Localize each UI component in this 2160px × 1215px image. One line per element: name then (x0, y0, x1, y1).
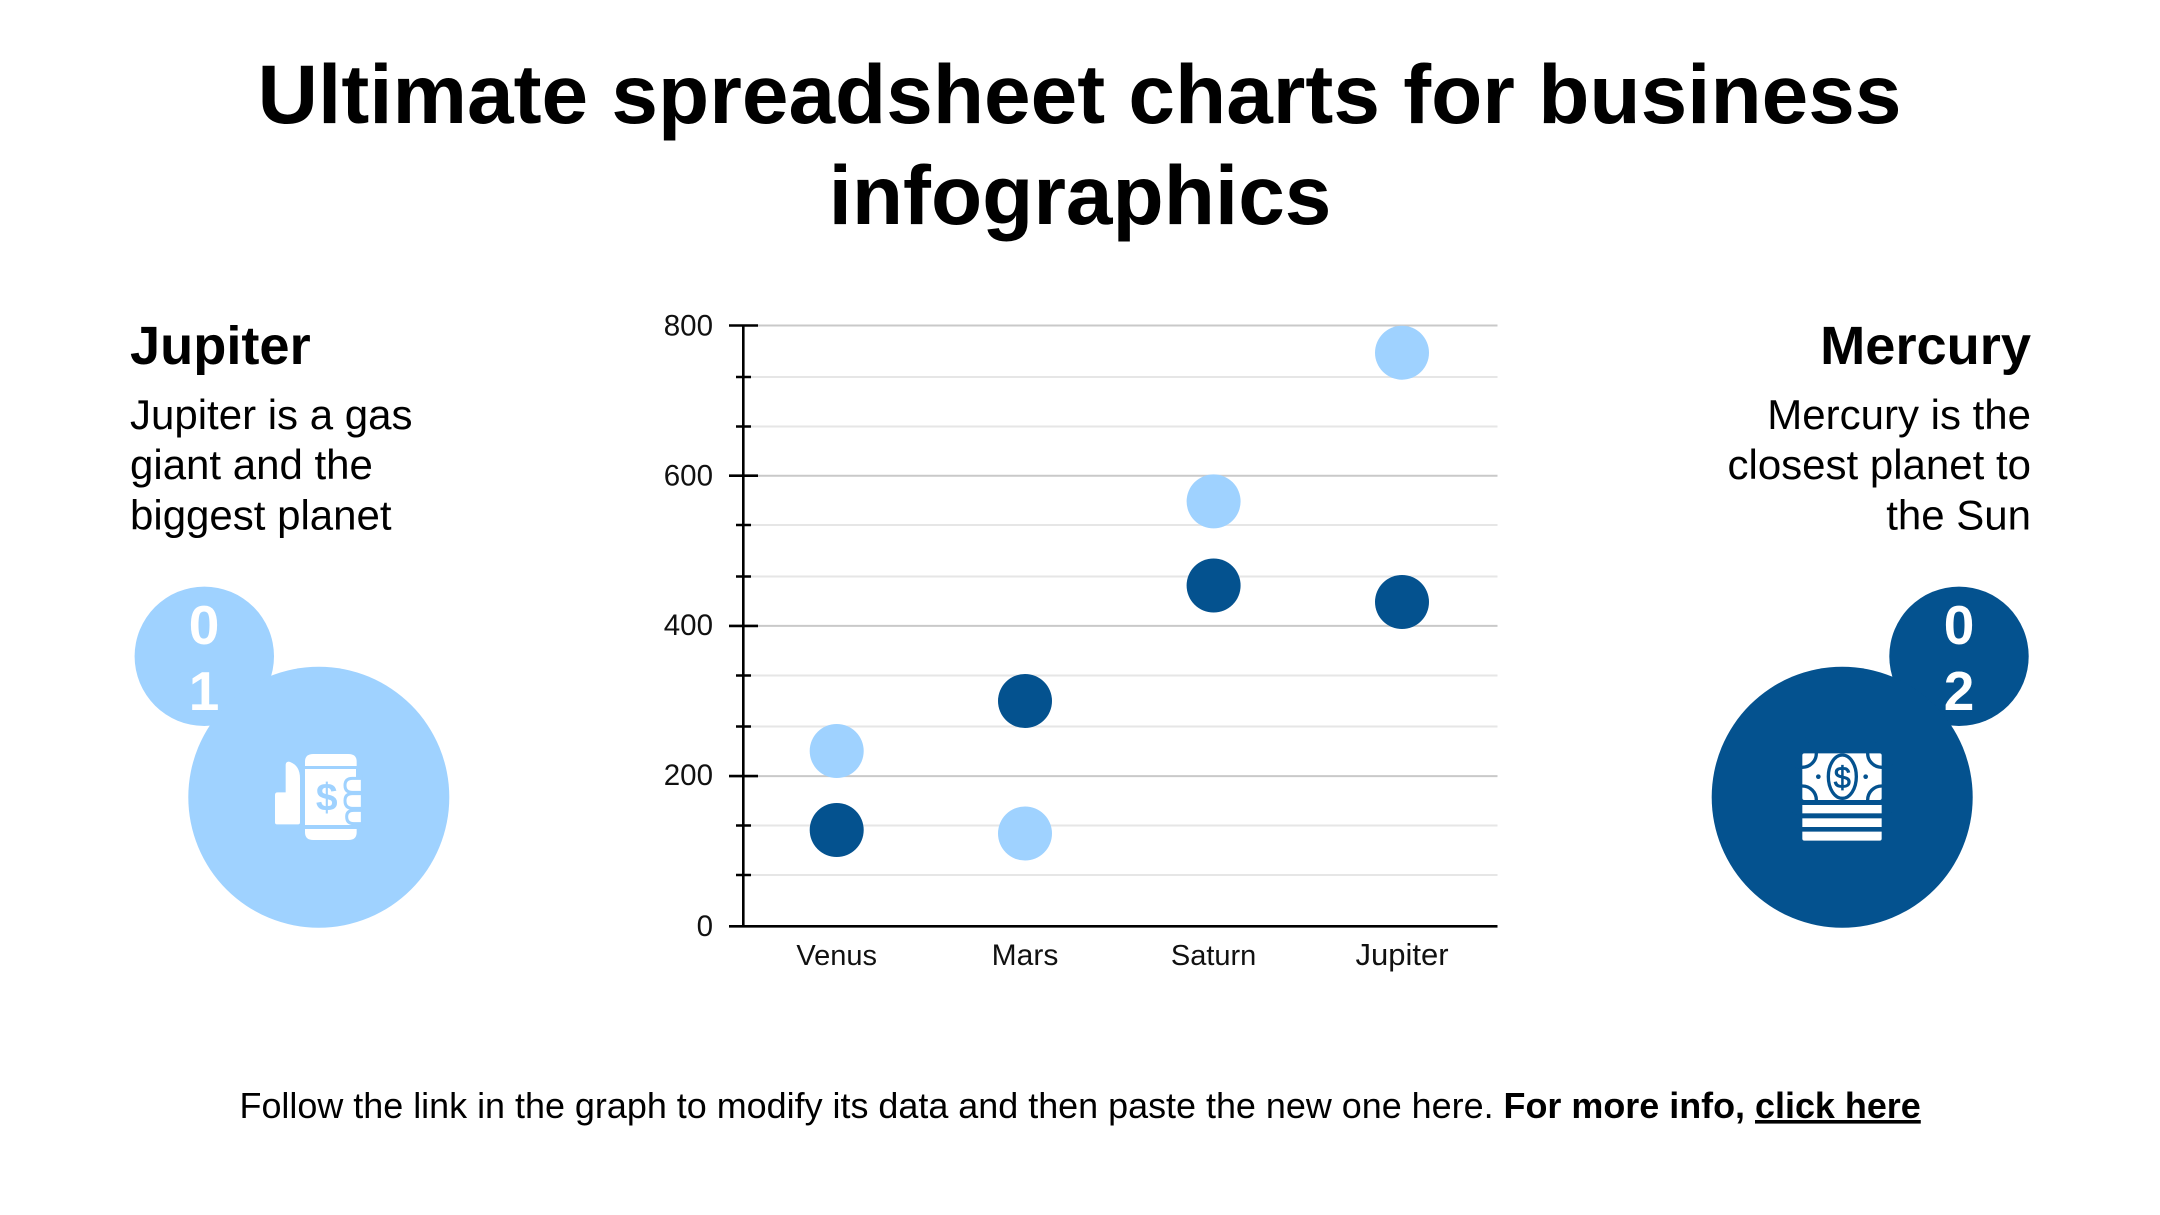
number 01 (189, 594, 219, 722)
text block: Jupiter description: biggest planet (130, 492, 392, 538)
chart: scatter plot by planet (664, 310, 1498, 972)
number 02 (1944, 594, 1974, 722)
icon: stack of banknotes (1788, 739, 1896, 841)
x axis labels: Jupiter (1355, 937, 1449, 972)
badge: 01 with phone icon (135, 587, 449, 928)
y axis labels: 0 (697, 910, 713, 943)
y axis labels: 800 (664, 310, 713, 342)
x axis labels: Saturn (1171, 940, 1256, 972)
heading: Jupiter: Jupiter (130, 316, 311, 376)
text block: Jupiter description: giant and the (130, 441, 373, 488)
text block: Mercury description: the Sun (1886, 492, 2031, 538)
text block: Mercury description (1727, 391, 2031, 538)
y axis labels (664, 310, 713, 943)
icon: hand holding phone with dollar (275, 754, 367, 840)
y axis labels: 200 (664, 759, 713, 792)
y axis labels: 600 (664, 460, 713, 492)
y axis labels: 400 (664, 609, 713, 642)
x axis labels: Venus (796, 940, 877, 972)
panel: Mercury text (1727, 316, 2031, 538)
icon: stack of banknotes: $ (1834, 761, 1851, 795)
y axis with ticks (729, 325, 1498, 926)
x axis labels (796, 937, 1449, 972)
light blue series (810, 326, 1429, 860)
number 01: 0 (189, 594, 219, 656)
dark blue series (810, 558, 1429, 857)
title: infographics (829, 148, 1331, 242)
grid lines (751, 326, 1498, 875)
number 02: 2 (1944, 660, 1974, 722)
text block: Jupiter description: Jupiter is a gas (130, 391, 412, 438)
number 02: 0 (1944, 594, 1974, 656)
footer note: Follow the link in the graph to modify its data and then paste the new one here. For more info, click here (240, 1085, 1921, 1126)
text block: Mercury description: Mercury is the (1767, 391, 2031, 438)
icon: hand holding phone with dollar: $ (316, 776, 338, 819)
heading: Mercury: Mercury (1820, 316, 2031, 376)
number 01: 1 (189, 660, 219, 722)
badge: 02 with money icon (1712, 587, 2029, 928)
x axis labels: Mars (992, 939, 1058, 972)
title (258, 47, 1901, 242)
text block: Jupiter description (130, 391, 412, 538)
panel: Jupiter text (130, 316, 412, 538)
text block: Mercury description: closest planet to (1727, 441, 2031, 488)
title: Ultimate spreadsheet charts for business (258, 47, 1901, 141)
